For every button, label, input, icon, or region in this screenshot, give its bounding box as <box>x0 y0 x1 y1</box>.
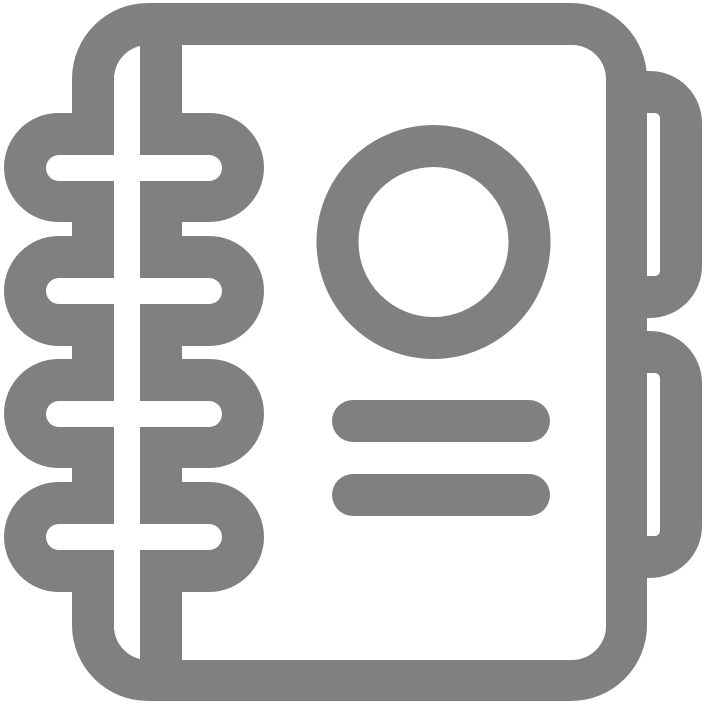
lower side tab <box>590 331 702 578</box>
second text line <box>332 474 550 516</box>
first text line <box>332 400 550 442</box>
upper side tab <box>590 71 702 318</box>
profile circle <box>338 146 530 338</box>
spiral binding rings <box>4 30 264 675</box>
